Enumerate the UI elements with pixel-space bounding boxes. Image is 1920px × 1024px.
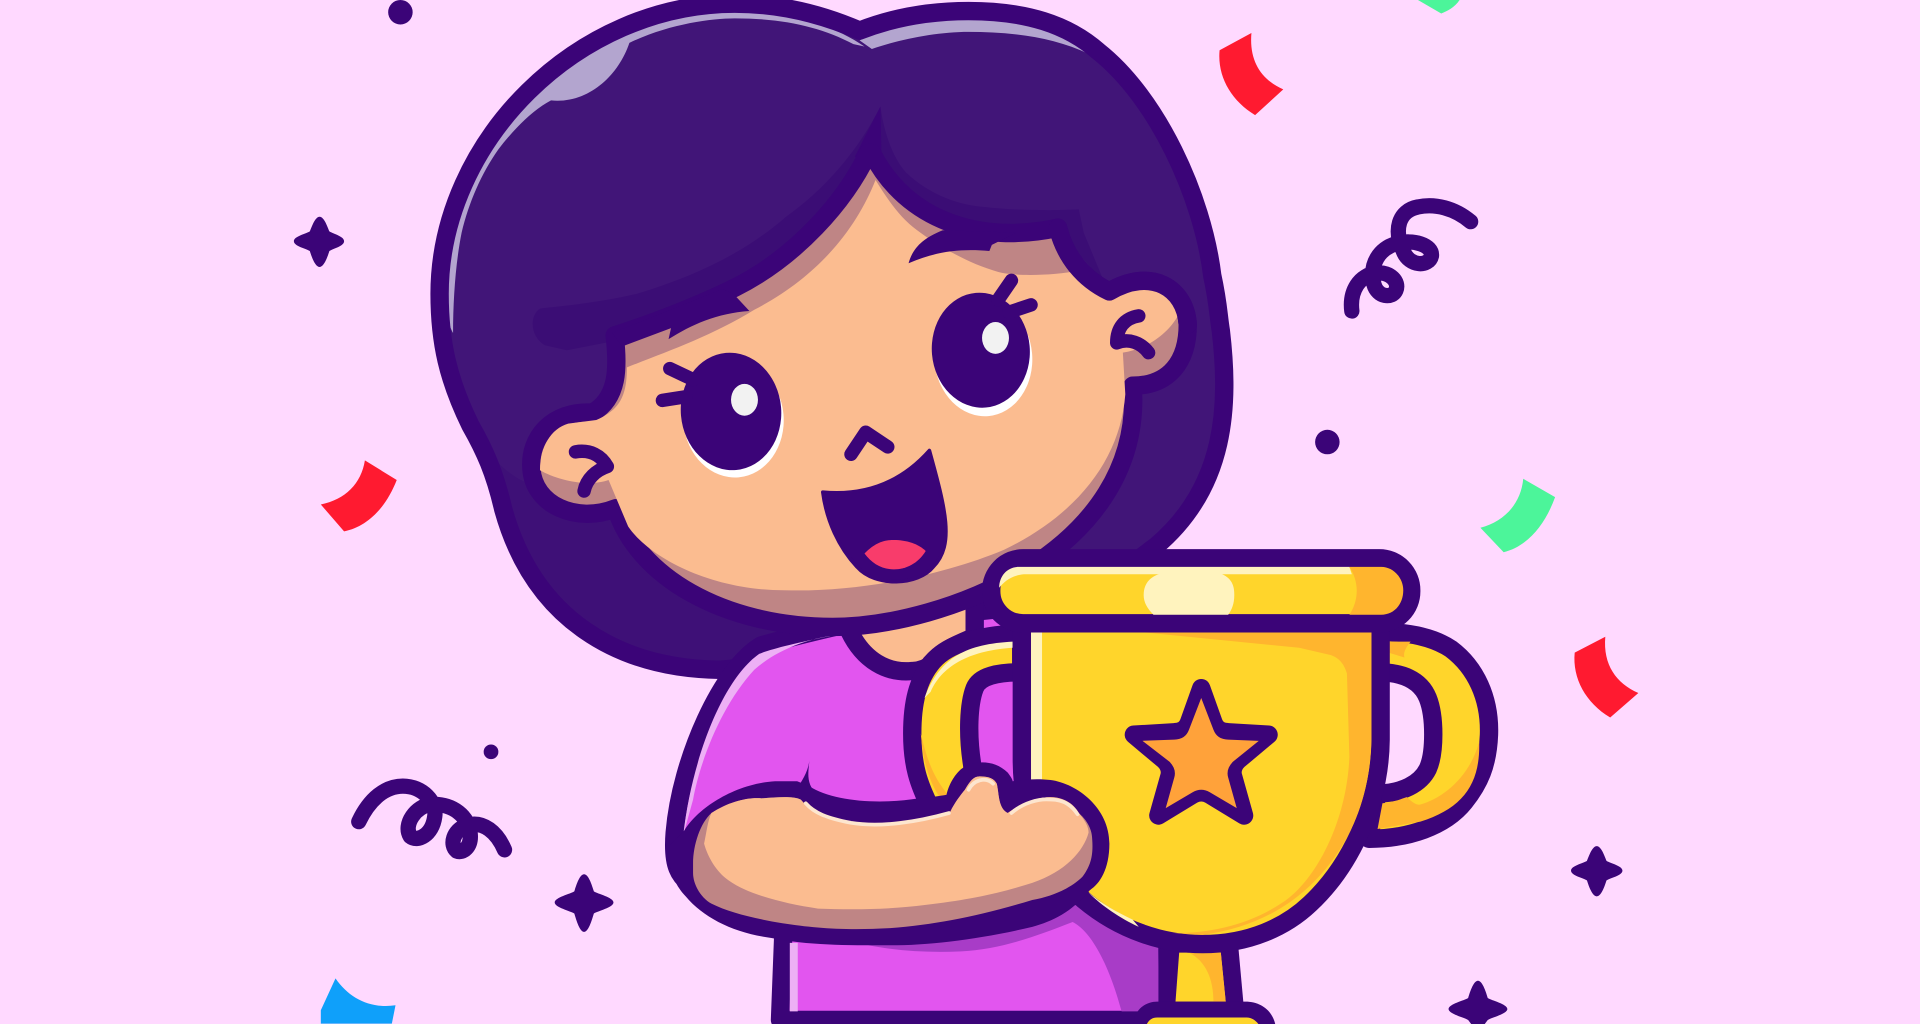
neck: [845, 588, 975, 671]
arm: shadow: [693, 776, 1092, 929]
right handle: [1369, 632, 1489, 839]
mouth: [823, 451, 946, 582]
sleeve crease: [796, 760, 818, 796]
right eye: [927, 280, 1037, 420]
left handle: [912, 633, 1021, 808]
arm: lit skin: [704, 776, 1089, 909]
right eyebrow tuft: [909, 230, 1016, 263]
nose: [851, 432, 888, 454]
hair: main shape: [440, 4, 1224, 670]
confetti: blue piece: [321, 978, 396, 1024]
cup: highlight: [1031, 632, 1042, 808]
hair: outline: [440, 4, 1224, 670]
hair: left highlight: [447, 10, 864, 333]
shirt: shadow: [868, 905, 1158, 1011]
arm: top highlight: [806, 780, 1078, 825]
face: lit skin: [540, 180, 1178, 590]
base: [1133, 1002, 1276, 1024]
left ear detail: [576, 451, 607, 491]
hair: top right highlight: [860, 17, 1089, 54]
arm and hand: [669, 760, 1109, 945]
cup: [1022, 623, 1381, 944]
shirt: sleeve highlight: [683, 636, 833, 835]
confetti: green pieces: [1418, 0, 1555, 552]
trophy: [912, 558, 1489, 1024]
stem: [1158, 943, 1244, 1010]
hair: fringe shade: [533, 107, 880, 350]
hair: [440, 4, 1224, 670]
streamers: [359, 206, 1471, 852]
left eye: [662, 348, 789, 482]
star: [1134, 688, 1269, 816]
face: [531, 107, 1188, 627]
fringe peak: [855, 107, 882, 164]
lid: [991, 558, 1411, 623]
sparkles: [294, 217, 1622, 1024]
shirt: [674, 606, 1169, 1020]
confetti and sparkles: [294, 0, 1638, 1024]
confetti: red pieces: [321, 33, 1638, 718]
body: [674, 588, 1169, 1020]
cup: shade: [1139, 632, 1371, 935]
right ear detail: [1117, 316, 1149, 353]
hair: lower shade: [470, 429, 796, 667]
cup: lower highlight: [1089, 893, 1139, 927]
hair edge over right temple: [1058, 228, 1188, 324]
shirt: lower highlight: [790, 943, 798, 1011]
left fringe tuft: [612, 289, 749, 347]
dots: [388, 0, 1340, 759]
arm: outline: [669, 762, 1109, 945]
face: shadow base and outline: [531, 153, 1188, 627]
